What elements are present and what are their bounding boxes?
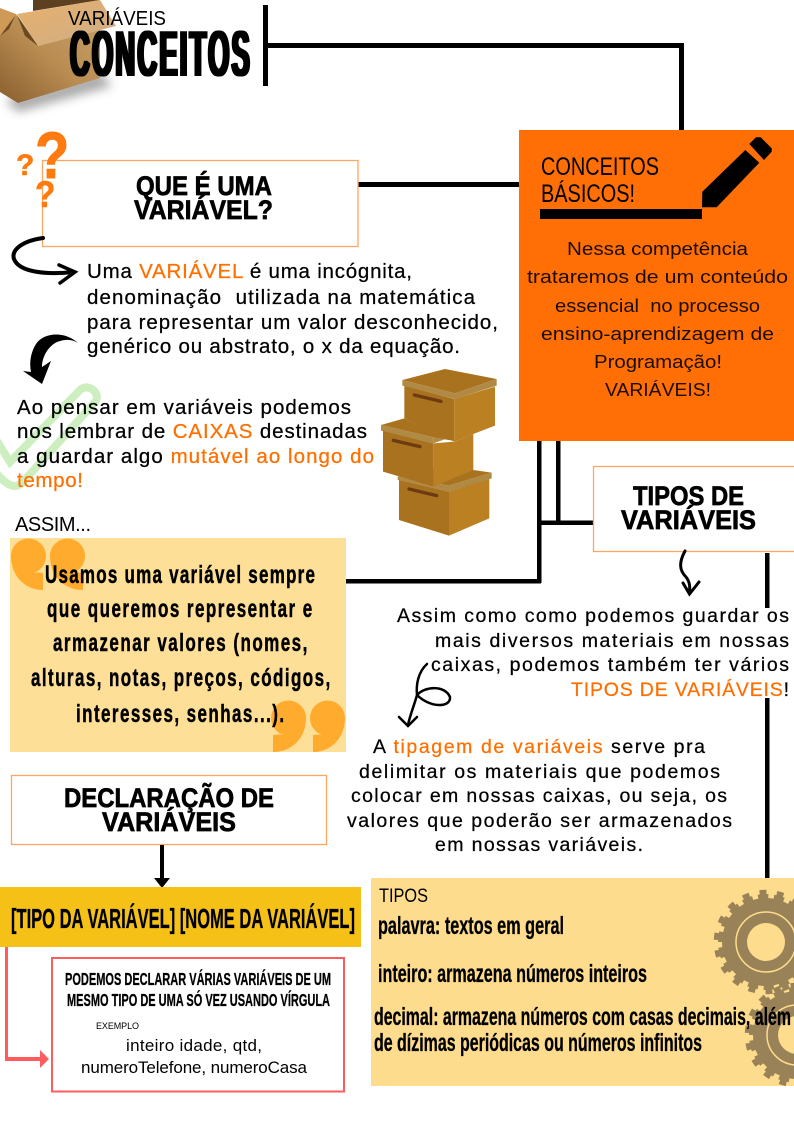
text block: tipos intro [397, 605, 789, 701]
text block: tipagem [347, 736, 732, 856]
panel: multiple declaration: MESMO TIPO DE UMA SÓ VEZ USANDO VÍRGULA [67, 989, 330, 1010]
arrow: loop [399, 664, 450, 726]
illustration: open cardboard box [0, 0, 116, 112]
text block: type list [374, 886, 791, 1057]
panel: syntax [0, 887, 361, 947]
connector lines [263, 5, 770, 878]
panel: multiple declaration: inteiro idade, qtd, [126, 1036, 262, 1055]
text block: caixas: nos lembrar de CAIXAS destinadas [17, 420, 367, 443]
panel: quote: interesses, senhas...). [76, 700, 284, 728]
text block: intro [527, 239, 788, 400]
text block: definition: genérico ou abstrato, o x da equação. [87, 335, 460, 358]
icon: question marks: ? [16, 149, 34, 182]
text block: tipagem: delimitar os materiais que podemos [359, 761, 720, 783]
arrow: curved to definition [14, 238, 75, 283]
heading: conceitos básicos [541, 153, 659, 208]
icon: closing quote [271, 700, 345, 752]
title: VARIÁVEIS [68, 7, 166, 30]
panel: que é uma variável: VARIÁVEL? [134, 194, 273, 225]
icon: gears [716, 892, 794, 1085]
icon: question marks: ? [35, 119, 69, 192]
text block: tipagem: em nossas variáveis. [435, 834, 643, 856]
text block: intro: trataremos de um conteúdo [527, 267, 788, 287]
icon: green check outline [0, 387, 97, 486]
text block: caixas: Ao pensar em variáveis podemos [17, 396, 351, 419]
panel: syntax: [TIPO DA VARIÁVEL] [NOME DA VARIÁVEL] [11, 903, 355, 934]
text block: intro: Nessa competência [567, 239, 749, 259]
panel: declaração de variáveis: VARIÁVEIS [102, 806, 236, 837]
text block: intro: ensino-aprendizagem de [541, 324, 774, 344]
panel: quote: armazenar valores (nomes, [53, 629, 307, 657]
text block: tipagem: valores que poderão ser armazenados [347, 810, 732, 832]
panel: multiple declaration: PODEMOS DECLARAR VÁRIAS VARIÁVEIS DE UM [65, 968, 331, 989]
heading: conceitos básicos: CONCEITOS [541, 153, 659, 181]
panel: multiple declaration: EXEMPLO [96, 1021, 139, 1031]
text block: caixas [17, 396, 374, 492]
panel: declaração de variáveis [12, 776, 326, 844]
text block: definition: Uma VARIÁVEL é uma incógnita, [87, 260, 412, 283]
label: assim: ASSIM... [15, 514, 91, 536]
panel: quote: alturas, notas, preços, códigos, [31, 664, 330, 692]
text block: tipos intro: TIPOS DE VARIÁVEIS! [571, 678, 789, 701]
text block: caixas: tempo! [17, 469, 83, 492]
text block: caixas: a guardar algo mutável ao longo do [17, 445, 374, 468]
panel: tipos de variáveis: VARIÁVEIS [621, 504, 756, 535]
text block: definition: para representar um valor desconhecido, [87, 311, 498, 334]
text block: tipos intro: mais diversos materiais em nossas [435, 630, 789, 652]
arrow: red elbow [5, 947, 49, 1068]
panel: tipos [371, 878, 794, 1086]
icon: pencil [540, 137, 772, 219]
panel: quote: Usamos uma variável sempre [45, 561, 315, 589]
heading: conceitos básicos: BÁSICOS! [541, 179, 635, 208]
panel: quote [10, 538, 346, 752]
panel: multiple declaration [52, 958, 344, 1092]
text block: tipos intro: Assim como como podemos guardar os [397, 605, 789, 627]
text block: type list: palavra: textos em geral [378, 912, 564, 940]
text block: tipagem: A tipagem de variáveis serve pra [373, 736, 705, 758]
arrow: down [154, 845, 170, 888]
panel: quote: que queremos representar e [47, 595, 312, 623]
panel: que é uma variável [42, 160, 358, 246]
text block: intro: Programação! [594, 352, 722, 372]
arrow: squiggle down [681, 551, 699, 594]
icon: question marks: ? [35, 174, 55, 215]
icon: question marks [16, 119, 69, 215]
panel: tipos de variáveis [594, 466, 794, 552]
text block: tipos intro: caixas, podemos também ter vários [431, 654, 789, 676]
text block: type list: inteiro: armazena números inteiros [378, 960, 647, 988]
title: CONCEITOS [70, 17, 250, 90]
text block: definition: denominação utilizada na matemática [87, 286, 476, 309]
illustration: stacked boxes [381, 369, 497, 536]
text block: tipagem: colocar em nossas caixas, ou seja, os [351, 785, 727, 807]
panel: multiple declaration: numeroTelefone, numeroCasa [81, 1058, 308, 1077]
panel: conceitos básicos [519, 130, 794, 441]
text block: type list: TIPOS [379, 886, 428, 907]
icon: opening quote [11, 538, 85, 590]
panel: declaração de variáveis: DECLARAÇÃO DE [64, 782, 274, 813]
arrow: curved down [23, 334, 78, 384]
text block: intro: essencial no processo [555, 296, 760, 316]
panel: tipos de variáveis: TIPOS DE [633, 481, 744, 511]
text block: definition [87, 260, 498, 358]
panel: que é uma variável: QUE É UMA [136, 170, 272, 201]
text block: intro: VARIÁVEIS! [605, 380, 711, 400]
